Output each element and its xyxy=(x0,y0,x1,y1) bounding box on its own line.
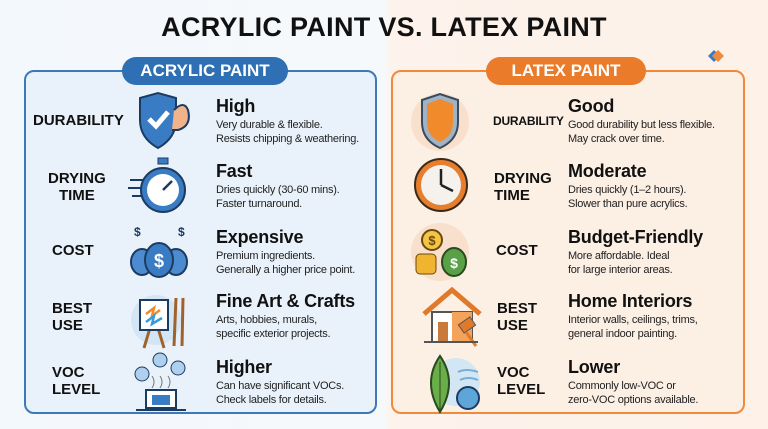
label drying xyxy=(48,170,106,204)
latex label durability: DURABILITY xyxy=(493,114,564,128)
icon: coins and bag xyxy=(411,223,469,281)
latex text: best use: Interior walls, ceilings, trims, xyxy=(568,314,698,326)
acrylic text: drying xyxy=(216,161,339,210)
acrylic text: best use: Fine Art & Crafts xyxy=(216,291,355,311)
icon: voc fumes xyxy=(134,352,186,411)
acrylic text: durability: Resists chipping & weathering. xyxy=(216,133,359,145)
latex text: drying xyxy=(568,161,687,210)
acrylic text: cost: Premium ingredients. xyxy=(216,250,315,262)
acrylic text: cost xyxy=(216,227,355,276)
acrylic text: drying: Faster turnaround. xyxy=(216,198,302,210)
acrylic text: best use xyxy=(216,291,355,340)
latex label drying: DRYING xyxy=(494,170,552,187)
latex text: durability: Good xyxy=(568,96,614,116)
label cost: COST xyxy=(52,242,94,259)
acrylic text: voc: Higher xyxy=(216,357,272,377)
latex text: voc: zero-VOC options available. xyxy=(568,394,698,406)
label voc: VOC xyxy=(52,364,85,381)
acrylic text: voc: Check labels for details. xyxy=(216,394,327,406)
icon: shield with arm xyxy=(139,92,190,150)
latex text: durability: May crack over time. xyxy=(568,133,664,145)
icon: easel xyxy=(131,295,184,348)
icon: money bags xyxy=(130,225,188,278)
latex text: best use: general indoor painting. xyxy=(568,328,677,340)
icon: money bags: $ xyxy=(134,225,141,239)
latex label voc: LEVEL xyxy=(497,381,545,398)
label voc: LEVEL xyxy=(52,381,100,398)
acrylic text: durability: High xyxy=(216,96,255,116)
latex label drying xyxy=(494,170,552,204)
heading: acrylic paint xyxy=(122,57,288,85)
acrylic text: best use: Arts, hobbies, murals, xyxy=(216,314,317,326)
acrylic text: drying: Fast xyxy=(216,161,252,181)
title: ACRYLIC PAINT VS. LATEX PAINT xyxy=(161,12,607,42)
icon: clock xyxy=(414,158,468,212)
latex text: cost: More affordable. Ideal xyxy=(568,250,669,262)
latex text: durability xyxy=(568,96,715,145)
icon: house with roller xyxy=(422,286,482,347)
acrylic text: durability xyxy=(216,96,359,145)
latex text: cost xyxy=(568,227,703,276)
latex text: voc: Commonly low-VOC or xyxy=(568,380,676,392)
icon: leaf and fan xyxy=(430,354,480,414)
latex label voc: VOC xyxy=(497,364,530,381)
heading: latex paint xyxy=(486,57,646,85)
acrylic text: cost: Expensive xyxy=(216,227,303,247)
label voc xyxy=(52,364,100,398)
acrylic text: voc xyxy=(216,357,344,406)
acrylic text: voc: Can have significant VOCs. xyxy=(216,380,344,392)
latex text: durability: Good durability but less flexible. xyxy=(568,119,715,131)
icon: decorative diamonds xyxy=(708,50,724,62)
icon: money bags: $ xyxy=(154,251,164,271)
heading: acrylic paint: ACRYLIC PAINT xyxy=(140,61,270,80)
acrylic labels: DURABILITY xyxy=(33,112,124,129)
latex text: best use: Home Interiors xyxy=(568,291,692,311)
icon: orange shield xyxy=(411,93,469,151)
latex label cost: COST xyxy=(496,242,538,259)
icon: coins and bag: $ xyxy=(450,255,458,271)
icon: coins and bag: $ xyxy=(428,233,436,248)
latex label drying: TIME xyxy=(494,187,530,204)
latex text: voc xyxy=(568,357,698,406)
panel: latex xyxy=(391,70,745,414)
latex text: drying: Moderate xyxy=(568,161,646,181)
latex label best use: USE xyxy=(497,317,528,334)
latex label best use xyxy=(497,300,537,334)
acrylic text: durability: Very durable & flexible. xyxy=(216,119,323,131)
latex text: voc: Lower xyxy=(568,357,620,377)
panel: acrylic xyxy=(24,70,377,414)
heading: latex paint: LATEX PAINT xyxy=(512,61,620,80)
acrylic text: cost: Generally a higher price point. xyxy=(216,264,355,276)
label best use: BEST xyxy=(52,300,92,317)
latex text: best use xyxy=(568,291,698,340)
latex label best use: BEST xyxy=(497,300,537,317)
latex text: drying: Dries quickly (1–2 hours). xyxy=(568,184,686,196)
latex text: cost: for large interior areas. xyxy=(568,264,672,276)
label drying: DRYING xyxy=(48,170,106,187)
acrylic text: drying: Dries quickly (30-60 mins). xyxy=(216,184,339,196)
icon: money bags: $ xyxy=(178,225,185,239)
acrylic text: best use: specific exterior projects. xyxy=(216,328,330,340)
label drying: TIME xyxy=(59,187,95,204)
latex text: drying: Slower than pure acrylics. xyxy=(568,198,687,210)
icon: stopwatch xyxy=(128,158,186,213)
latex label voc xyxy=(497,364,545,398)
label best use xyxy=(52,300,92,334)
label best use: USE xyxy=(52,317,83,334)
latex text: cost: Budget-Friendly xyxy=(568,227,703,247)
